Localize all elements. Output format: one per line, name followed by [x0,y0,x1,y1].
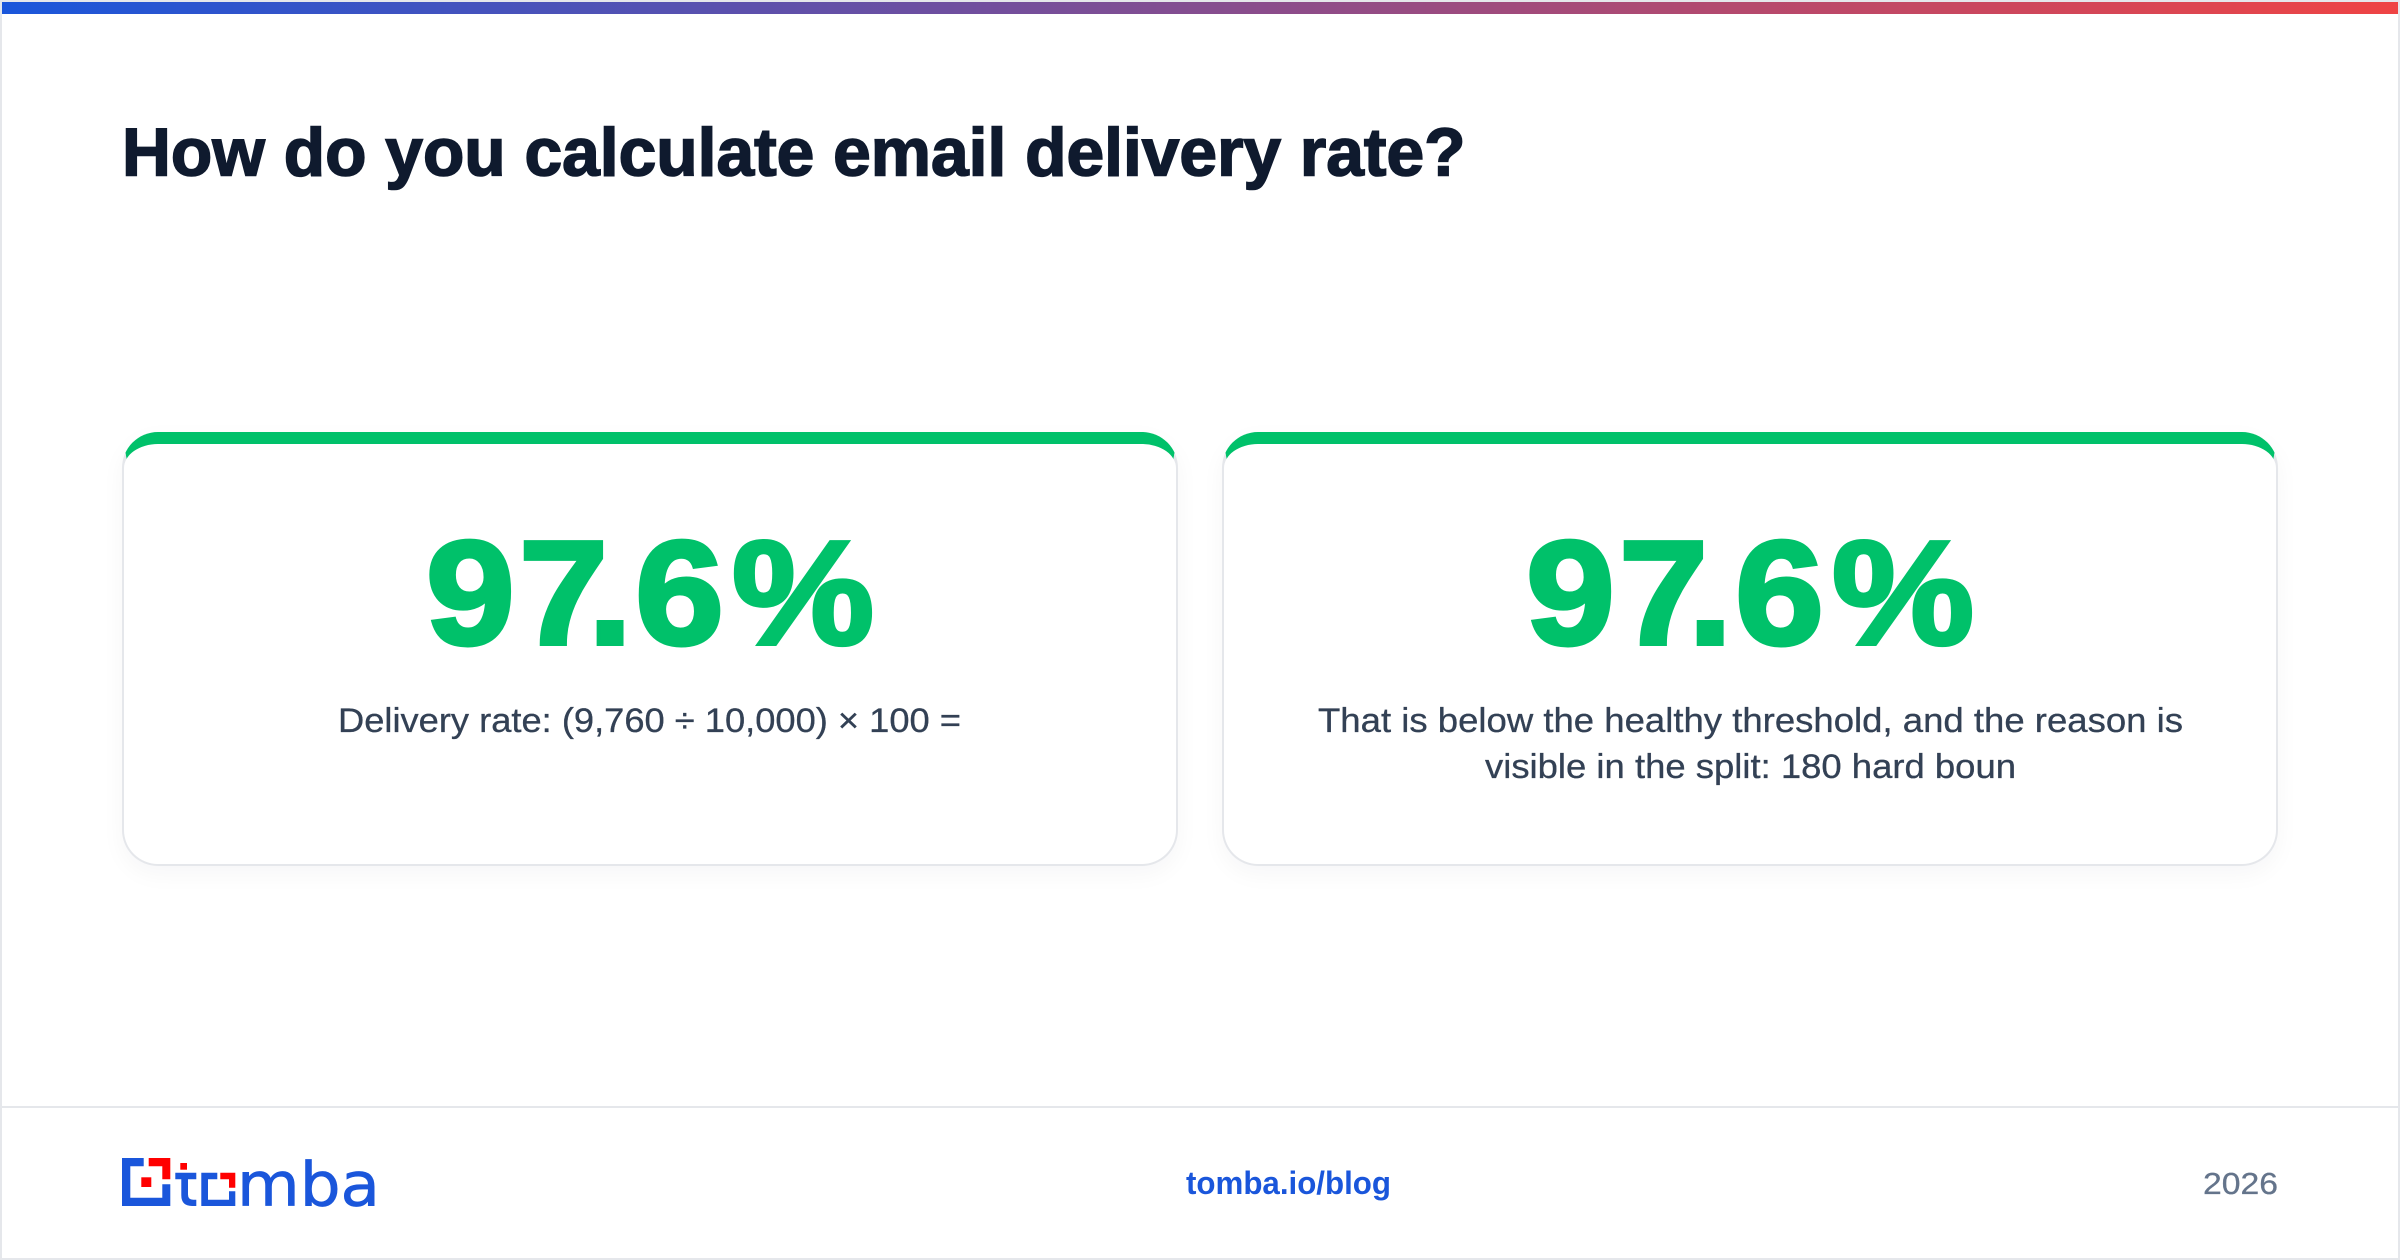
footer logo: tomba [122,1151,380,1221]
explanation text: That is below the healthy threshold, and the reason is [1318,702,2183,740]
logo letters mba: mba [237,1151,380,1221]
explanation text [1318,702,2183,786]
big stat: 97.6%: 97.6% [1526,510,1974,676]
title: How do you calculate email delivery rate? [122,114,1466,190]
explanation text: visible in the split: 180 hard boun [1485,748,2016,786]
footer link: tomba.io/blog [1186,1165,1391,1201]
logo letter o [201,1173,235,1206]
panel: threshold explanation [1222,432,2278,866]
panel: delivery rate formula [122,432,1178,866]
formula text: Delivery rate: (9,760 ÷ 10,000) × 100 = [338,702,961,740]
big stat: 97.6%: 97.6% [426,510,874,676]
icon: square brand mark [122,1158,170,1206]
logo letter t [175,1163,196,1206]
footer year: 2026 [2203,1166,2278,1201]
